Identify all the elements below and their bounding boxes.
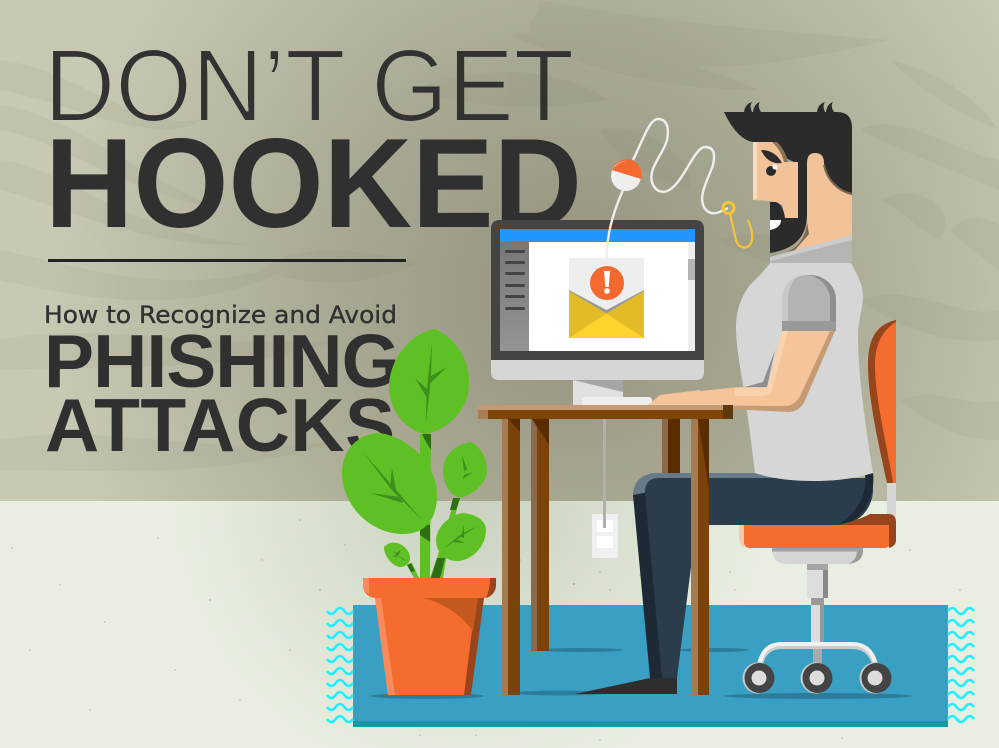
monitor chin [491,360,704,380]
shirt [736,263,873,481]
pants [633,473,873,678]
beard [770,162,807,253]
monitor body [491,220,704,360]
big leaf [342,433,437,534]
sleeve [782,275,836,331]
wall outlet and cable [592,418,618,558]
title divider [48,259,406,262]
stems [407,434,460,578]
desk top [478,405,733,419]
title line: don't get: DON’T GET [44,28,574,143]
arm [650,331,835,412]
hand [648,390,700,406]
face highlight [753,142,757,200]
collar [770,237,852,263]
chair back support [887,483,896,517]
neck and ear [790,153,852,253]
post [807,564,828,644]
subtitle line: How to Recognize and Avoid [44,301,397,329]
plant [342,329,496,695]
seat bracket [772,548,863,564]
phishing: PHISHING [44,319,400,403]
top leaf [389,329,469,434]
lower right leaf [436,513,486,561]
rug fringe left [327,608,353,722]
eye [766,164,778,176]
hook [723,202,752,248]
wall background [0,0,999,502]
fishing line, bobber and hook [606,119,752,258]
rug [353,605,948,727]
person [575,102,873,694]
hair [724,102,852,195]
chair back [868,320,896,483]
eyebrow [761,150,782,163]
stand [573,378,623,406]
desk front legs [502,419,709,695]
desk back legs [531,419,680,651]
title line: hooked: HOOKED [45,112,582,254]
chest shadow [745,350,775,387]
keyboard [582,397,652,406]
small leaf [384,543,410,567]
subtitle [44,301,400,467]
face shadow [772,142,788,162]
chair [739,320,896,694]
title [44,28,582,254]
teeth [770,220,781,230]
wheels [742,662,892,694]
fishing line [606,119,728,258]
face [753,142,798,218]
shoe [575,678,677,694]
pot [363,578,496,695]
chair base [760,644,875,668]
rug fringe right [948,608,974,722]
envelope with alert [569,258,644,338]
bobber [611,159,642,191]
monitor [491,220,704,406]
beard shadow [787,222,809,252]
attacks: ATTACKS [45,383,395,467]
right leaf [443,442,487,498]
seat [739,514,896,548]
hair shadow [824,165,852,194]
screen [500,229,695,351]
floor background [0,501,999,748]
